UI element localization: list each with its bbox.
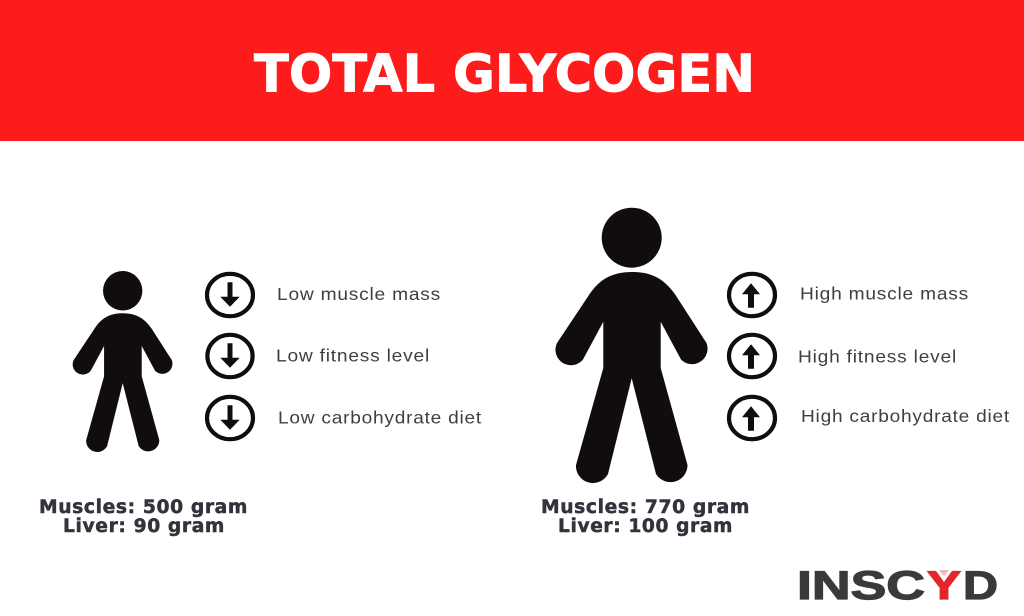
icon: small person [73, 271, 172, 452]
title: TOTAL GLYCOGEN [254, 44, 755, 104]
text: high muscle mass: High muscle mass [800, 284, 969, 304]
panel: high glycogen [541, 208, 1010, 537]
panel: low glycogen [39, 271, 482, 537]
text: high totals [541, 497, 750, 537]
icon: down arrow 3 [207, 397, 253, 439]
text: low totals: Muscles: 500 gram [39, 497, 248, 518]
text: high fitness level: High fitness level [798, 346, 957, 366]
text: high totals: Muscles: 770 gram [541, 497, 750, 518]
text: low muscle mass: Low muscle mass [277, 284, 441, 304]
header banner [0, 0, 1024, 141]
logo: INSCYD: INSC [797, 564, 925, 608]
logo: INSCYD [797, 564, 998, 608]
logo: INSCYD: D [963, 564, 998, 608]
text: low carbohydrate diet: Low carbohydrate diet [278, 408, 482, 428]
text: low totals: Liver: 90 gram [63, 516, 225, 537]
icon: large person [555, 208, 708, 483]
icon: down arrow 1 [207, 274, 253, 316]
text: high carbohydrate diet: High carbohydrate diet [801, 406, 1010, 426]
text: high totals: Liver: 100 gram [558, 516, 733, 537]
text: low fitness level: Low fitness level [276, 346, 430, 366]
icon: up arrow 1 [729, 274, 775, 316]
icon: up arrow 2 [729, 335, 775, 377]
icon: up arrow 3 [729, 397, 775, 439]
logo: INSCYD: Y [927, 564, 961, 608]
text: low totals [39, 497, 248, 537]
icon: down arrow 2 [207, 335, 253, 377]
